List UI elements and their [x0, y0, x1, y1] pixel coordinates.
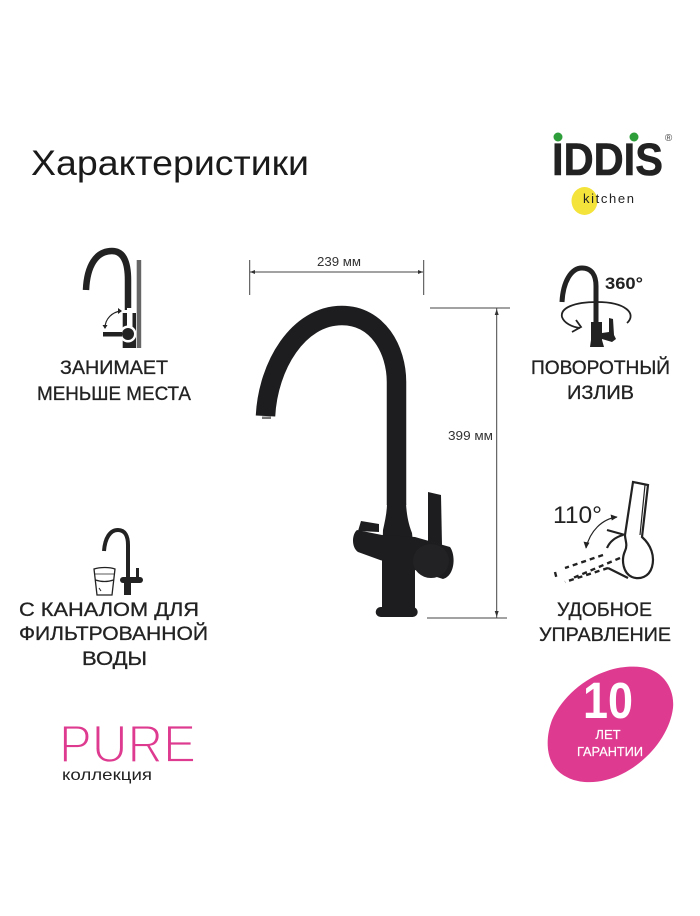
logo: IDDIS kitchen: IDDIS: [552, 134, 663, 185]
right handle: [413, 544, 449, 578]
dimension: height 399 mm: [427, 308, 510, 618]
collection name: PURE: коллекция: [62, 767, 152, 784]
right lever: [428, 492, 442, 545]
label: easy control: УПРАВЛЕНИЕ: [539, 625, 671, 646]
badge: 10 years warranty: ЛЕТ: [595, 727, 621, 742]
logo: IDDIS kitchen: [552, 132, 673, 215]
label: swivel spout: ИЗЛИВ: [567, 383, 634, 404]
icon: filtered water faucet with glass: [94, 530, 143, 595]
icon: swivel spout 360: [562, 268, 643, 347]
base column: [382, 558, 415, 609]
neck flare: [382, 503, 415, 560]
icon: lever 110 degrees: [553, 482, 653, 582]
collection name: PURE: PURE: [59, 715, 196, 774]
base ring: [376, 607, 418, 617]
label: filtered water channel: [19, 600, 208, 670]
icon: lever 110 degrees: 110°: [553, 502, 602, 529]
label: saves space: МЕНЬШЕ МЕСТА: [37, 384, 191, 405]
badge: 10 years warranty: 10: [583, 672, 633, 729]
mixer body: [353, 530, 454, 579]
badge: 10 years warranty: ГАРАНТИИ: [577, 744, 643, 759]
spout tip: [262, 416, 271, 419]
title: Характеристики: [31, 144, 309, 183]
logo: IDDIS kitchen: ®: [665, 133, 673, 144]
spout: [266, 316, 396, 505]
logo: IDDIS kitchen: kitchen: [583, 191, 634, 206]
label: swivel spout: ПОВОРОТНЫЙ: [531, 357, 670, 379]
dimension: height 399 mm: 399 мм: [448, 429, 493, 443]
label: swivel spout: [531, 357, 670, 404]
label: filtered water channel: С КАНАЛОМ ДЛЯ: [19, 600, 199, 621]
label: easy control: УДОБНОЕ: [557, 600, 652, 621]
icon: space saving faucet: [86, 251, 141, 348]
product: black kitchen faucet: [262, 316, 454, 617]
dimension: width 239 mm: 239 мм: [317, 255, 361, 269]
badge: 10 years warranty: [548, 667, 673, 782]
label: saves space: ЗАНИМАЕТ: [60, 358, 168, 379]
label: saves space: [37, 358, 191, 405]
dimension: width 239 mm: [250, 255, 424, 295]
label: filtered water channel: ФИЛЬТРОВАННОЙ: [19, 623, 208, 645]
label: filtered water channel: ВОДЫ: [82, 649, 147, 670]
left lever: [358, 521, 379, 532]
icon: swivel spout 360: 360°: [605, 274, 643, 293]
label: easy control: [539, 600, 671, 646]
